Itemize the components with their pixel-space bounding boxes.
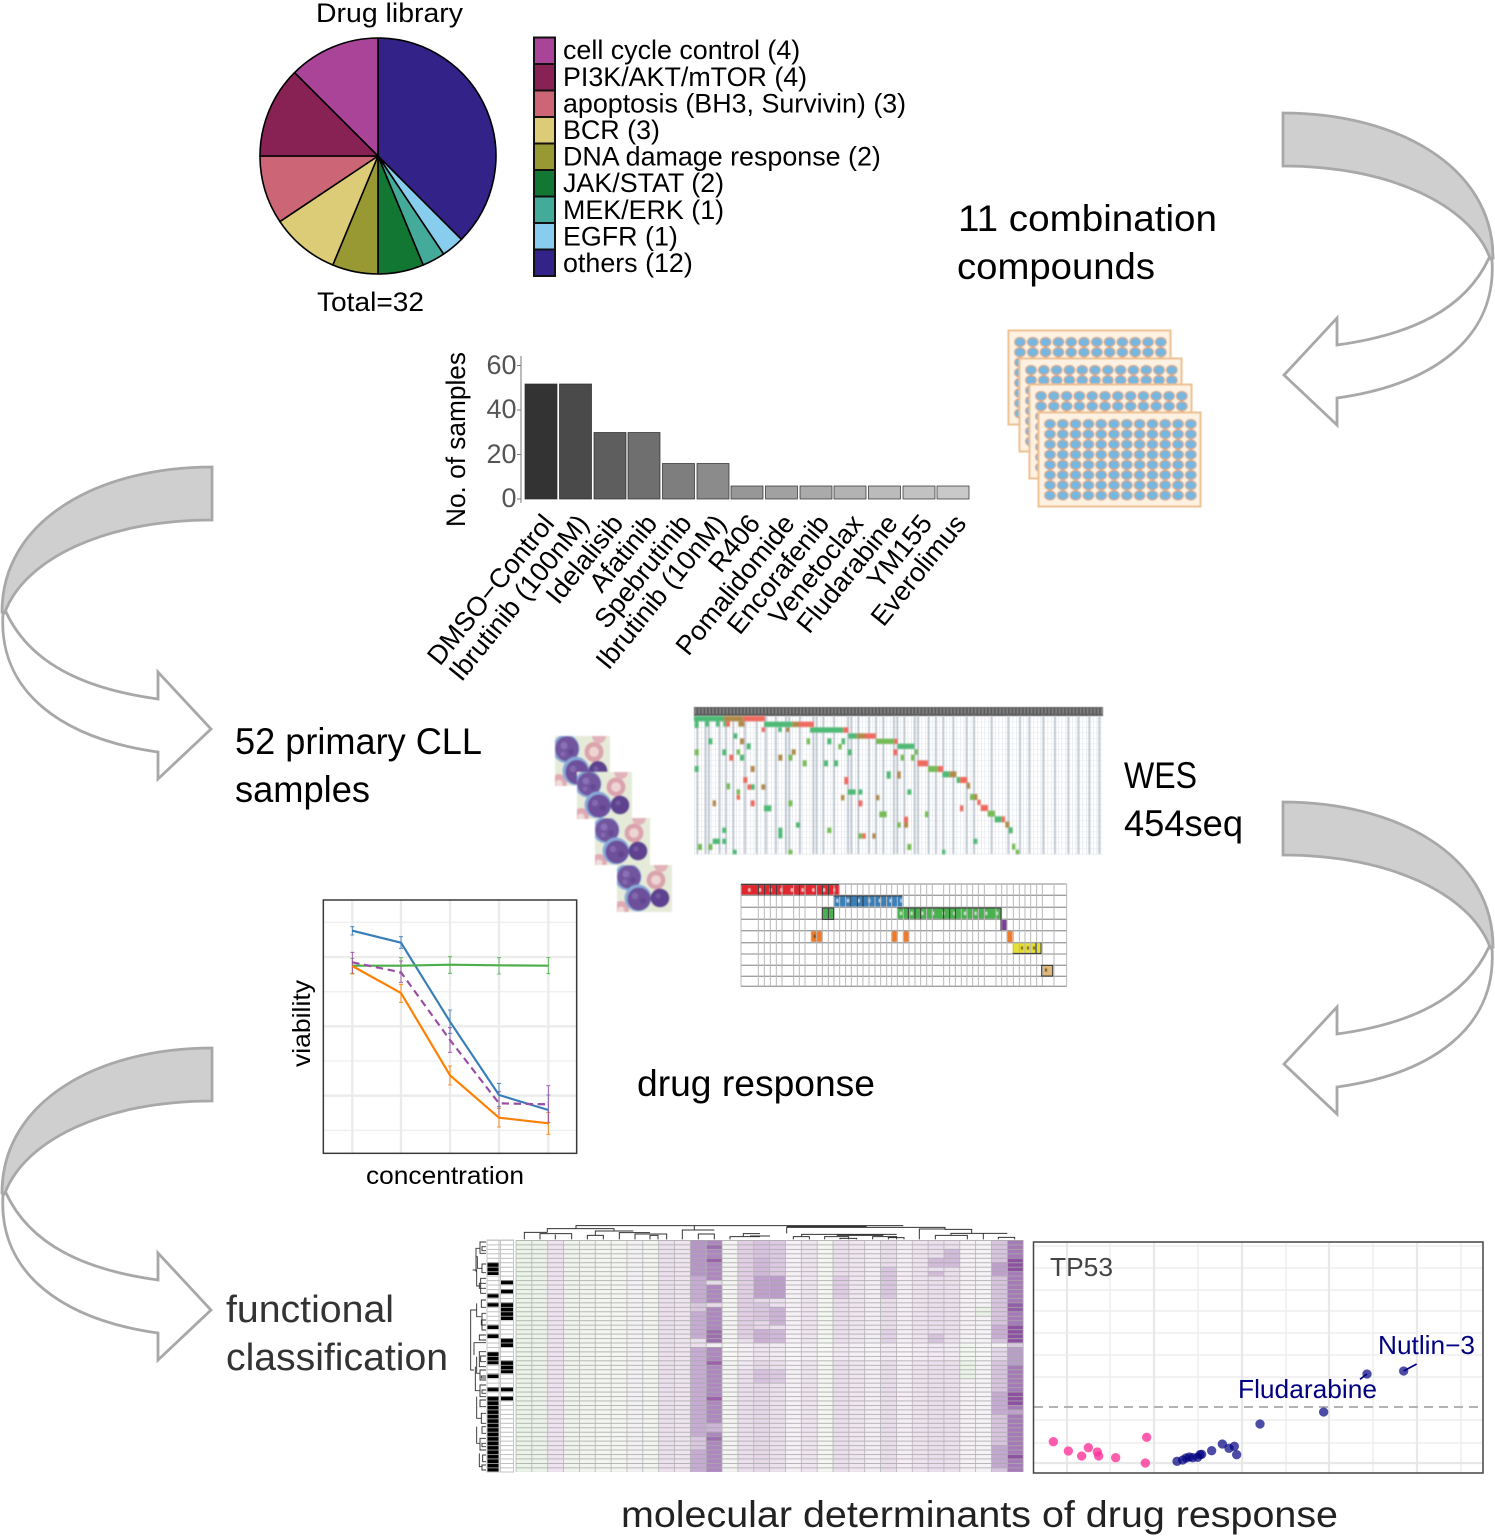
label: functional classification	[226, 1289, 448, 1379]
bar chart: number of samples per drug: Fludarabine	[791, 509, 904, 639]
oncoprint mutation matrix	[694, 707, 1103, 855]
pie legend: DNA damage response (2)	[563, 142, 881, 172]
line chart: viability vs concentration: concentration	[366, 1162, 524, 1190]
pie legend: BCR (3)	[563, 115, 660, 145]
pie chart: drug library	[260, 38, 496, 274]
label: combination compounds: compounds	[957, 246, 1155, 287]
bar chart: number of samples per drug: Encorafenib	[721, 509, 835, 640]
pie legend: others (12)	[563, 248, 693, 278]
pie legend: MEK/ERK (1)	[563, 195, 724, 225]
heatmap cells	[516, 1240, 1023, 1472]
top dendrogram	[524, 1226, 903, 1239]
heatmap with dendrograms	[471, 1226, 1023, 1472]
bar chart: number of samples per drug	[421, 350, 972, 686]
bar chart: number of samples per drug: Ibrutinib (10nM)	[590, 509, 732, 675]
label: functional classification: functional	[226, 1289, 394, 1331]
line chart: viability vs concentration	[288, 900, 577, 1190]
label: drug response: drug response	[637, 1063, 875, 1104]
pie legend: EGFR (1)	[563, 222, 678, 252]
staircase of driver mutations	[694, 716, 1013, 854]
bar chart: number of samples per drug: R406	[702, 509, 766, 578]
arrow: top right	[1283, 113, 1493, 425]
scatter plot: TP53 associations: TP53	[1050, 1252, 1113, 1282]
scatter plot: TP53 associations	[1034, 1242, 1483, 1473]
bar chart: number of samples per drug: Afatinib	[583, 509, 663, 598]
bar chart: number of samples per drug: Pomalidomide	[670, 509, 801, 661]
bar chart: number of samples per drug: 60	[486, 350, 516, 380]
left dendrogram	[471, 1242, 486, 1470]
bar chart: number of samples per drug: 0	[501, 483, 516, 513]
bar chart: number of samples per drug: No. of samples	[441, 352, 471, 527]
pie legend: JAK/STAT (2)	[563, 168, 724, 198]
label: sequencing methods: WES	[1124, 755, 1197, 796]
label: primary CLL samples: samples	[235, 769, 370, 810]
label: functional classification: classification	[226, 1337, 448, 1379]
arrow: right lower	[1283, 802, 1493, 1114]
pie legend: apoptosis (BH3, Survivin) (3)	[563, 88, 906, 118]
pie total label: Total=32	[317, 287, 424, 317]
label: sequencing methods	[1124, 755, 1243, 844]
label: primary CLL samples	[235, 721, 482, 810]
bar chart: number of samples per drug: DMSO−Control	[421, 509, 560, 671]
icon: stacked well plates	[1008, 330, 1200, 506]
bar chart: number of samples per drug: Venetoclax	[763, 509, 869, 630]
data points	[1049, 1364, 1417, 1468]
bar chart: number of samples per drug: Idelalisib	[540, 509, 629, 609]
label: primary CLL samples: 52 primary CLL	[235, 721, 482, 762]
icon: blood smear images	[551, 729, 672, 917]
sample annotation columns	[487, 1240, 514, 1472]
line chart: viability vs concentration: viability	[288, 979, 316, 1067]
bar chart: number of samples per drug: Ibrutinib (100nM)	[443, 509, 595, 686]
bar chart: number of samples per drug: 20	[486, 439, 516, 469]
label: molecular determinants of drug response: molecular determinants of drug response	[621, 1494, 1338, 1535]
mutation table	[741, 884, 1067, 986]
pie legend: cell cycle control (4)	[563, 35, 800, 65]
pie legend	[534, 35, 906, 278]
bar chart: number of samples per drug: YM155	[861, 509, 938, 594]
label: combination compounds	[957, 198, 1217, 287]
bar chart: number of samples per drug: Spebrutinib	[588, 509, 698, 634]
label: combination compounds: 11 combination	[958, 198, 1217, 239]
bar chart: number of samples per drug: Everolimus	[865, 509, 972, 632]
bar chart: number of samples per drug: 40	[486, 394, 516, 424]
pie legend: PI3K/AKT/mTOR (4)	[563, 62, 807, 92]
scatter plot: TP53 associations: Fludarabine	[1238, 1374, 1377, 1404]
scatter plot: TP53 associations: Nutlin−3	[1378, 1330, 1475, 1360]
label: sequencing methods: 454seq	[1124, 803, 1243, 844]
arrow: left middle	[2, 467, 212, 779]
arrow: left lower	[2, 1048, 212, 1360]
